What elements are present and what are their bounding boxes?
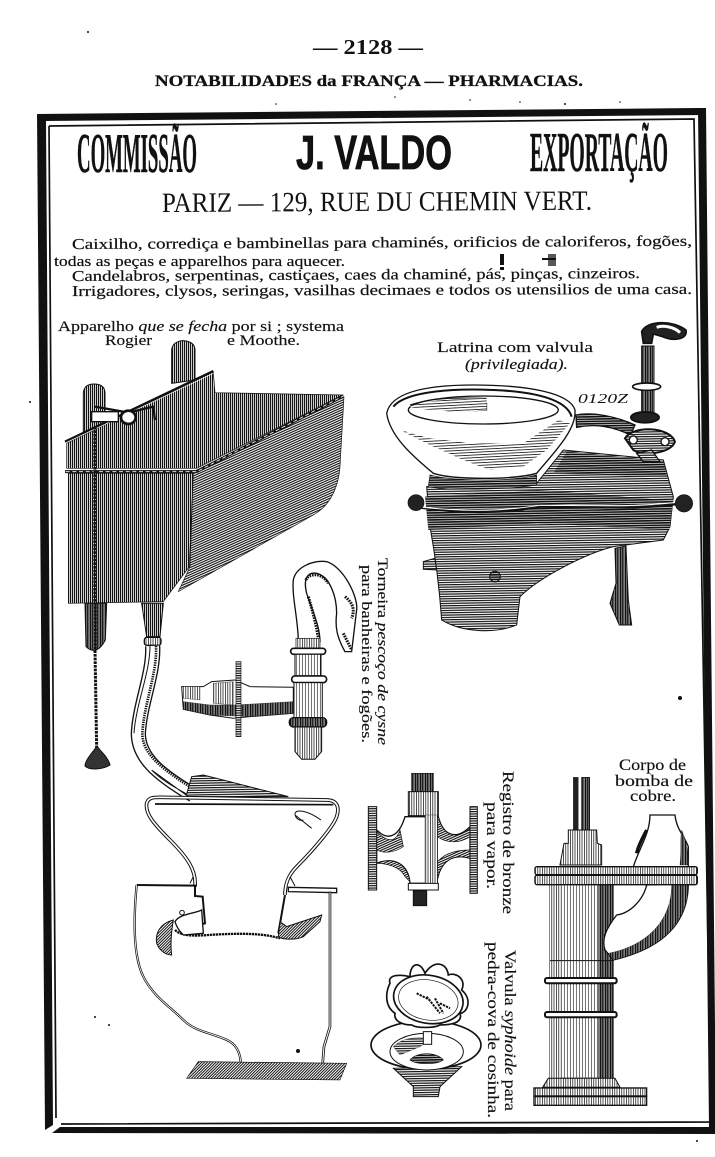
page number: — 2128 — xyxy=(312,35,424,59)
caption: torneira: Torneira pescoço de cysne xyxy=(374,558,390,745)
illustration: copper pump body xyxy=(534,777,697,1105)
caption: corpo de bomba: Corpo de xyxy=(619,757,686,774)
header: j. valdo: J. VALDO xyxy=(296,127,452,180)
caption: valvula xyxy=(484,942,518,1118)
caption: valvula: Valvula syphoide para xyxy=(501,950,518,1111)
caption: apparelho xyxy=(58,319,344,349)
description text: Candelabros, serpentinas, castiçaes, caes da chaminé, pás, pinças, cinzeiros. xyxy=(72,266,640,285)
caption: latrina: (privilegiada). xyxy=(465,357,568,373)
caption: registro: para vapor. xyxy=(483,802,500,889)
description text: Irrigadores, clysos, seringas, vasilhas decimaes e todos os utensilios de uma casa. xyxy=(72,282,692,300)
caption: valvula: pedra-cova de cosinha. xyxy=(484,942,501,1118)
description text: todas as peças e apparelhos para aquecer. xyxy=(54,254,345,270)
caption: corpo de bomba: bomba de xyxy=(615,773,693,790)
illustration: swan neck faucet xyxy=(182,561,357,759)
caption: registro xyxy=(483,771,516,914)
caption: corpo de bomba: cobre. xyxy=(630,788,676,805)
illustration: cistern xyxy=(65,341,344,748)
caption: torneira: para banheiras e fogões. xyxy=(358,565,374,743)
running heading: NOTABILIDADES da FRANÇA — PHARMACIAS. xyxy=(155,73,583,90)
description text xyxy=(54,234,692,300)
caption: torneira xyxy=(358,558,390,745)
caption: latrina xyxy=(437,340,593,373)
illustration: latrine with valve xyxy=(387,323,693,631)
text: COMMISSÃO xyxy=(77,123,197,185)
icon: chain pull handle xyxy=(85,746,110,769)
address line: PARIZ — 129, RUE DU CHEMIN VERT. xyxy=(162,186,592,219)
caption: latrina: Latrina com valvula xyxy=(437,340,593,356)
caption: corpo de bomba xyxy=(615,757,693,805)
caption: apparelho: Apparelho que se fecha por si ; systema xyxy=(58,319,344,335)
caption: apparelho: e Moothe. xyxy=(227,333,300,349)
illustration: bronze steam register xyxy=(368,773,477,906)
caption: registro: Registro de bronze xyxy=(499,771,516,914)
illustration: toilet cross section xyxy=(135,770,347,1080)
stamp number: 0120Z xyxy=(578,392,628,407)
caption: apparelho: Rogier xyxy=(105,333,152,349)
illustration: supply pipe xyxy=(134,603,196,795)
description text: Caixilho, corrediça e bambinellas para chaminés, orificios de caloriferos, fogões, xyxy=(72,234,692,253)
illustration: syphon valve xyxy=(371,964,481,1097)
